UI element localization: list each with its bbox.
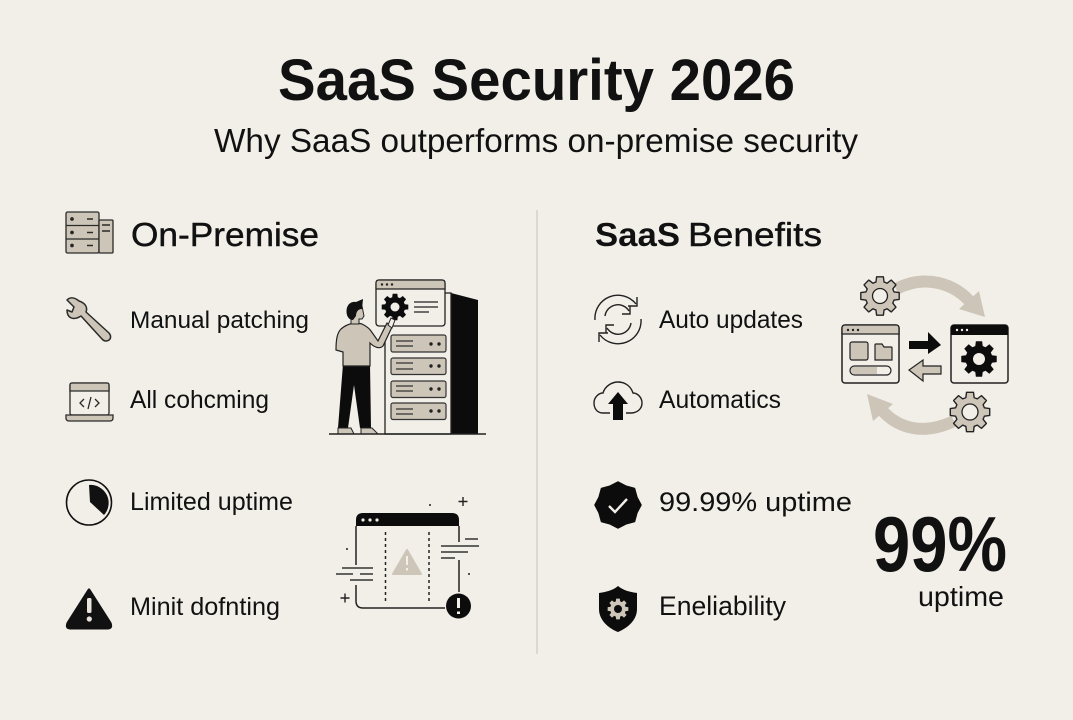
arc arrow bottom bbox=[880, 408, 954, 429]
title: SaaS Security 2026 bbox=[278, 48, 795, 113]
illustration: broken window alert bbox=[336, 497, 479, 618]
icon: cloud upload bbox=[594, 382, 642, 420]
icon: warning triangle bbox=[67, 590, 111, 628]
icon: wrench bbox=[67, 298, 111, 341]
heading: on-premise: On-Premise bbox=[131, 216, 319, 253]
label: manual patching: Manual patching bbox=[130, 307, 309, 334]
left window bbox=[842, 325, 899, 383]
icon: server bbox=[66, 212, 113, 253]
exchange arrows bbox=[909, 332, 941, 354]
icon: sync arrows bbox=[595, 295, 641, 344]
stat: 99% uptime: uptime bbox=[918, 581, 1004, 612]
label: auto updates: Auto updates bbox=[659, 306, 803, 334]
icon: verified badge bbox=[595, 482, 641, 528]
right window bbox=[951, 325, 1008, 383]
illustration: automated update cycle bbox=[842, 277, 1008, 432]
illustration: person configuring server bbox=[329, 280, 486, 434]
panel: on-premise bbox=[66, 212, 486, 628]
heading: saas benefits: SaaS bbox=[595, 216, 680, 253]
label: minit dofnting: Minit dofnting bbox=[130, 593, 280, 621]
config window bbox=[376, 280, 445, 326]
stat: 99% uptime: 99% bbox=[873, 500, 1007, 588]
rack units bbox=[391, 335, 446, 420]
label: limited uptime: Limited uptime bbox=[130, 488, 293, 516]
label: all cohcming: All cohcming bbox=[130, 386, 269, 414]
icon: limited uptime clock bbox=[66, 480, 112, 525]
person bbox=[338, 364, 371, 428]
server tower bbox=[451, 293, 478, 434]
label: 99.99% uptime: 99.99% uptime bbox=[659, 487, 852, 517]
panel: saas benefits bbox=[594, 216, 1008, 632]
subtitle: Why SaaS outperforms on-premise security bbox=[214, 122, 859, 159]
gear top bbox=[861, 277, 899, 315]
heading: saas benefits bbox=[595, 216, 822, 253]
label: eneliability: Eneliability bbox=[659, 591, 786, 621]
arc arrow top bbox=[896, 282, 972, 304]
label: automatics: Automatics bbox=[659, 386, 781, 414]
heading: saas benefits: Benefits bbox=[688, 216, 822, 253]
gear bottom bbox=[950, 392, 990, 432]
icon: laptop code bbox=[66, 383, 113, 421]
icon: security shield bbox=[599, 586, 637, 632]
stat: 99% uptime bbox=[873, 500, 1007, 612]
